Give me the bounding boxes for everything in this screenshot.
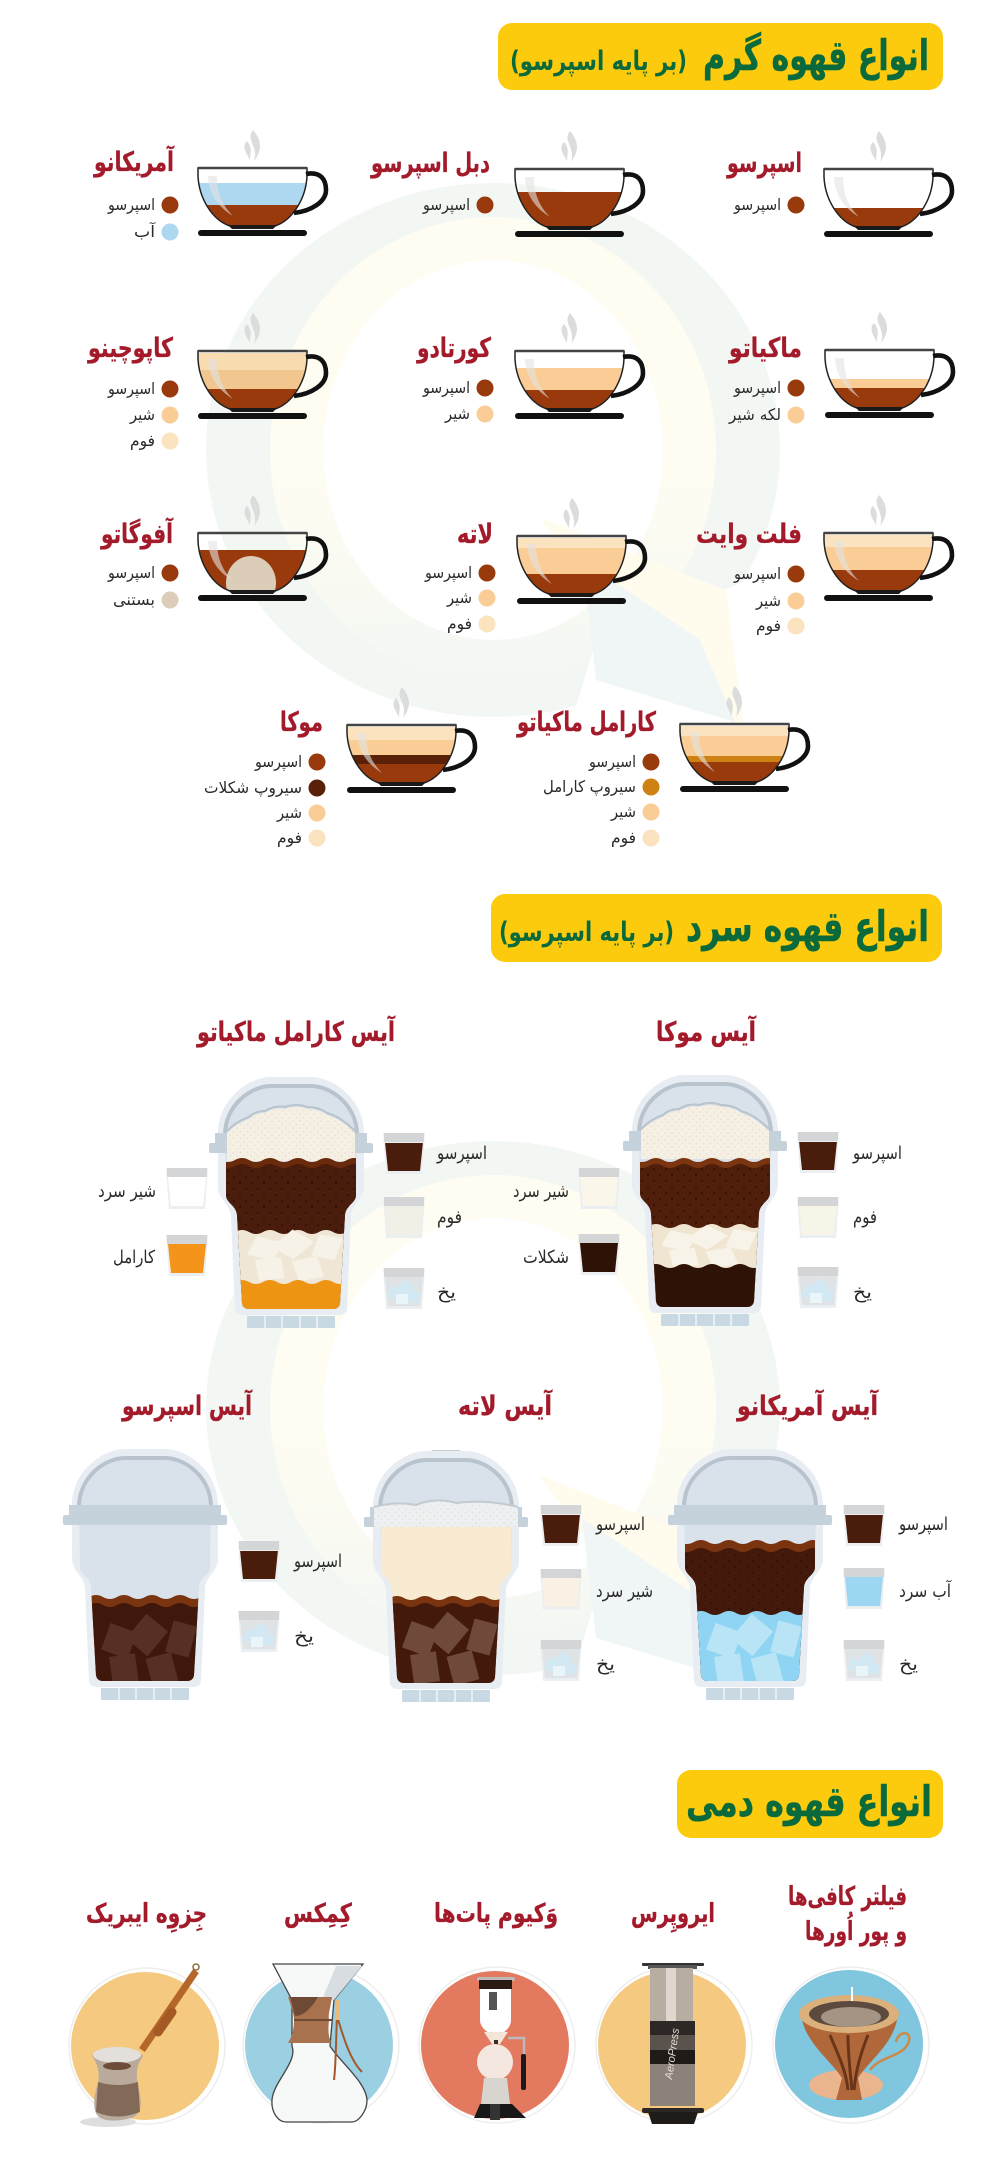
legend: milk: [276, 803, 326, 823]
legend: milk spot: [728, 405, 804, 425]
legend: foam: فوم: [277, 828, 302, 848]
drink: iced mocha: [514, 1015, 901, 1326]
legend: caramel syrup: سیروپ کارامل: [543, 777, 636, 797]
background watermark logo, cold section: [206, 1141, 820, 1718]
title: iced latte: آیس لاته: [458, 1389, 553, 1422]
drink: iced espresso: [63, 1389, 341, 1700]
title: espresso: اسپرسو: [726, 148, 802, 179]
small cup: ice: یخ: [596, 1654, 615, 1675]
small cup: ice: [540, 1640, 615, 1681]
legend: milk: شیر: [276, 803, 302, 823]
title: iced mocha: آیس موکا: [656, 1015, 757, 1048]
drink: cappuccino: [86, 313, 326, 451]
legend: milk: [446, 588, 496, 608]
small cup: cold milk: [513, 1168, 620, 1209]
title: filter coffee and pour-over: فیلتر کافی‌ها: [788, 1882, 907, 1912]
legend: foam: فوم: [756, 616, 781, 636]
title: filter coffee and pour-over: [788, 1882, 907, 1947]
icon: siphon vacuum pot: [419, 1967, 575, 2123]
legend: foam: [277, 828, 326, 848]
title: cappuccino: کاپوچینو: [86, 333, 173, 364]
title: iced espresso: آیس اسپرسو: [121, 1389, 253, 1422]
background watermark logo, hot section: [206, 183, 820, 760]
drink: caramel macchiato: [516, 686, 808, 848]
title: cezve ibrik: جِزوِه ایبریک: [86, 1899, 207, 1933]
small cup: cold water: آب سرد: [899, 1579, 952, 1602]
legend: espresso: اسپرسو: [733, 564, 781, 584]
drink: iced caramel macchiato: [98, 1015, 486, 1328]
small cup: ice: [383, 1268, 456, 1309]
small cup: cold milk: شیر سرد: [513, 1181, 569, 1202]
legend: foam: فوم: [447, 614, 472, 634]
legend: espresso: اسپرسو: [733, 195, 781, 215]
iced cup: espresso: [63, 1449, 227, 1700]
brew method: chemex: [243, 1899, 399, 2123]
small cup: espresso: [843, 1505, 948, 1546]
small cup: cold milk: [540, 1569, 653, 1610]
small cup: cold milk: [98, 1168, 208, 1209]
legend: ice cream: بستنی: [113, 590, 155, 609]
title: chemex: کِمِکس: [284, 1899, 353, 1929]
iced cup: mocha: [623, 1075, 787, 1326]
small cup: caramel: کارامل: [113, 1247, 155, 1268]
drink: double espresso: [370, 131, 643, 237]
cup: affogato: [198, 495, 326, 610]
drink: latte: [424, 498, 645, 634]
small cup: foam: فوم: [853, 1207, 877, 1228]
drink: affogato: [100, 495, 326, 610]
cup: cortado: [515, 313, 643, 419]
small cup: ice: یخ: [437, 1282, 456, 1303]
legend: milk: شیر: [446, 588, 472, 608]
small cup: foam: فوم: [437, 1207, 462, 1228]
small cup: espresso: اسپرسو: [436, 1143, 487, 1164]
cup: cappuccino: [198, 313, 326, 419]
heading: cold coffee: (بر پایه اسپرسو): [499, 917, 674, 948]
drink: cortado: [416, 313, 643, 424]
small cup: ice: یخ: [853, 1282, 872, 1303]
small cup: ice: [843, 1640, 918, 1681]
legend: espresso: اسپرسو: [588, 752, 636, 772]
icon: chemex: [243, 1964, 399, 2123]
cup: americano: [198, 130, 326, 236]
legend: foam: [447, 614, 496, 634]
legend: espresso: اسپرسو: [254, 752, 302, 772]
legend: ice cream: [113, 590, 178, 609]
title: vacuum pots: وَکیوم پات‌ها: [434, 1899, 558, 1929]
small cup: foam: [383, 1197, 462, 1238]
drink: americano: [92, 130, 326, 241]
cup: caramel macchiato: [680, 686, 808, 792]
heading: brewed coffee: [677, 1770, 943, 1838]
title: americano: آمریکانو: [92, 145, 175, 178]
drink: espresso: [726, 131, 952, 237]
small cup: espresso: [238, 1541, 342, 1582]
cup: mocha: [347, 687, 475, 793]
title: macchiato: ماکیاتو: [727, 333, 802, 364]
title: filter coffee and pour-over: و پور اُورها: [805, 1911, 907, 1947]
small cup: ice: [797, 1267, 872, 1308]
legend: milk: شیر: [444, 404, 470, 424]
legend: foam: فوم: [611, 828, 636, 848]
legend: espresso: اسپرسو: [422, 195, 470, 215]
legend: espresso: اسپرسو: [107, 379, 155, 399]
brew method: aeropress: [596, 1899, 752, 2124]
small cup: espresso: [383, 1133, 487, 1174]
small cup: foam: [797, 1197, 877, 1238]
small cup: espresso: اسپرسو: [898, 1514, 948, 1535]
small cup: ice: [238, 1611, 314, 1652]
legend: foam: [756, 616, 804, 636]
small cup: cold milk: شیر سرد: [596, 1581, 653, 1602]
iced cup: americano: [666, 1449, 834, 1873]
drink: macchiato: [727, 312, 953, 425]
cup: double espresso: [515, 131, 643, 237]
cup: macchiato: [825, 312, 953, 418]
cup: espresso: [824, 131, 952, 237]
title: iced caramel macchiato: آیس کارامل ماکیاتو: [195, 1015, 396, 1048]
legend: milk: [129, 405, 178, 425]
cup: flat white: [824, 495, 952, 601]
legend: milk: شیر: [129, 405, 155, 425]
legend: milk: شیر: [755, 591, 781, 611]
drink: flat white: [696, 495, 952, 636]
icon: aeropress: AeroPress: [663, 2027, 682, 2081]
heading: hot coffee: (بر پایه اسپرسو): [510, 46, 687, 77]
brew method: filter coffee and pour-over: [773, 1882, 929, 2123]
title: iced americano: آیس آمریکانو: [735, 1389, 879, 1422]
small cup: espresso: اسپرسو: [852, 1143, 902, 1164]
legend: milk: [444, 404, 494, 424]
legend: milk: [610, 802, 660, 822]
title: affogato: آفوگاتو: [100, 517, 174, 550]
legend: foam: [611, 828, 660, 848]
small cup: caramel: [113, 1235, 208, 1276]
small cup: espresso: اسپرسو: [595, 1514, 645, 1535]
drink: iced latte: [364, 1389, 652, 1702]
small cup: espresso: اسپرسو: [293, 1551, 342, 1572]
small cup: chocolate: [523, 1234, 620, 1275]
title: flat white: فلت وایت: [696, 519, 802, 550]
title: caramel macchiato: کارامل ماکیاتو: [516, 707, 656, 738]
small cup: ice: یخ: [294, 1626, 314, 1647]
legend: foam: [130, 431, 178, 451]
legend: espresso: اسپرسو: [424, 563, 472, 583]
small cup: cold milk: شیر سرد: [98, 1181, 156, 1202]
cup: latte: [517, 498, 645, 604]
small cup: espresso: [797, 1132, 902, 1173]
legend: foam: فوم: [130, 431, 155, 451]
drink: iced americano: [666, 1389, 952, 1873]
small cup: ice: یخ: [899, 1654, 918, 1675]
icon: cezve ibrik: [69, 1964, 225, 2127]
legend: espresso: اسپرسو: [422, 378, 470, 398]
icon: aeropress: [596, 1963, 752, 2124]
heading: hot coffee: [498, 23, 943, 90]
title: mocha: موکا: [280, 707, 323, 738]
small cup: espresso: [540, 1505, 645, 1546]
title: cortado: کورتادو: [416, 333, 491, 364]
legend: espresso: اسپرسو: [107, 195, 155, 215]
legend: espresso: اسپرسو: [733, 378, 781, 398]
legend: espresso: اسپرسو: [107, 563, 155, 583]
heading: cold coffee: [491, 894, 942, 962]
legend: water: آب: [134, 222, 157, 241]
title: latte: لاته: [457, 519, 493, 550]
legend: milk: [755, 591, 804, 611]
small cup: chocolate: شکلات: [523, 1247, 569, 1268]
iced cup: caramel macchiato: [209, 1077, 373, 1328]
legend: milk: شیر: [610, 802, 636, 822]
legend: milk spot: لکه شیر: [728, 405, 781, 425]
brew method: cezve ibrik: [69, 1899, 225, 2127]
icon: pour-over dripper: [773, 1967, 929, 2123]
legend: water: [134, 222, 178, 241]
small cup: cold water: [843, 1568, 952, 1609]
drink: mocha: [204, 687, 475, 848]
legend: chocolate syrup: سیروپ شکلات: [204, 778, 302, 798]
title: double espresso: دبل اسپرسو: [370, 148, 490, 179]
brew method: vacuum pots: [419, 1899, 575, 2123]
iced cup: latte: [364, 1450, 528, 1702]
title: aeropress: ایروپِرس: [631, 1899, 715, 1933]
